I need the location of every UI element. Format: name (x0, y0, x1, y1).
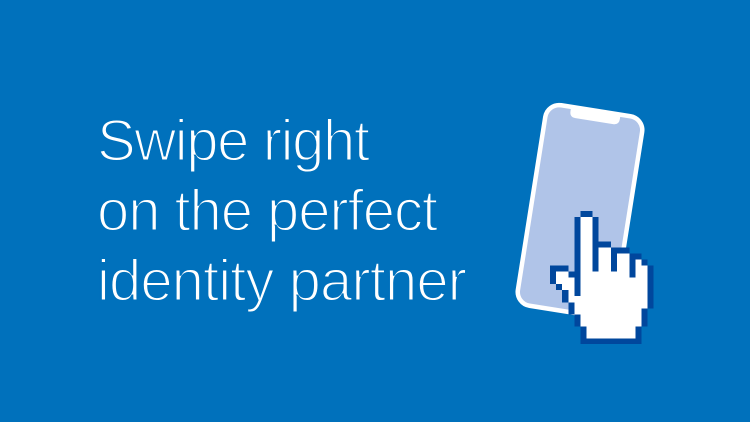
headline text: identity partner (97, 248, 467, 314)
icon: pixel pointing hand cursor (550, 211, 653, 344)
headline text: on the perfect (97, 178, 438, 244)
headline text: Swipe right (97, 108, 370, 174)
headline text (97, 108, 467, 314)
icon: smartphone (516, 103, 644, 319)
